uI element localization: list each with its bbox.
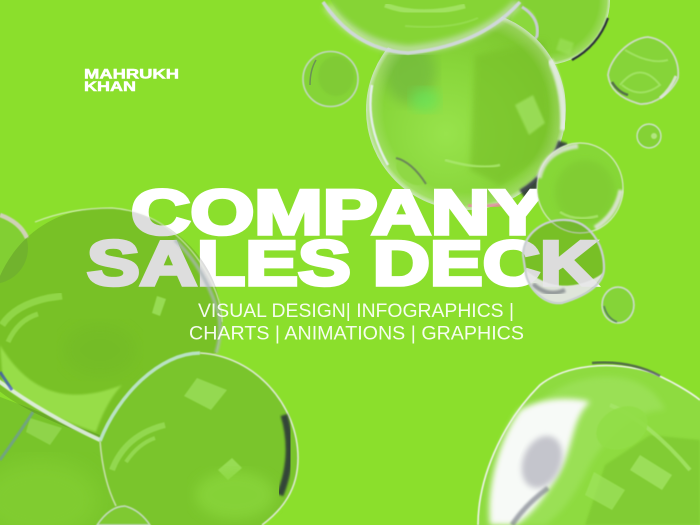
bubble: bottom small	[97, 506, 150, 525]
bubble: large left	[0, 208, 222, 440]
bubble: large centre	[366, 10, 566, 210]
bubble: top right	[480, 0, 610, 65]
subtitle line 2: CHARTS | ANIMATIONS | GRAPHICS	[189, 322, 524, 344]
bubble: small lower right	[602, 287, 634, 323]
subtitle line 1: VISUAL DESIGN| INFOGRAPHICS |	[198, 300, 514, 322]
title line 2: SALES DECK	[87, 229, 597, 299]
subtitle	[189, 300, 524, 344]
title line 1: COMPANY	[131, 178, 545, 248]
bubble: top left edge	[0, 212, 28, 284]
author last name: KHAN	[84, 78, 136, 94]
bubble: over the K	[523, 220, 604, 303]
bubble: bottom right	[478, 363, 700, 525]
bubble: lower left front	[100, 353, 298, 525]
bubble: medium right	[537, 143, 623, 233]
bubble: blob right	[608, 37, 678, 104]
author first name: MAHRUKH	[84, 66, 179, 82]
bubble: top large	[319, 0, 525, 53]
bubble: bottom left behind	[0, 395, 130, 525]
bubble: small left	[302, 51, 358, 107]
bubble: tiny right	[637, 124, 661, 148]
author name	[84, 66, 179, 94]
title	[87, 178, 597, 299]
